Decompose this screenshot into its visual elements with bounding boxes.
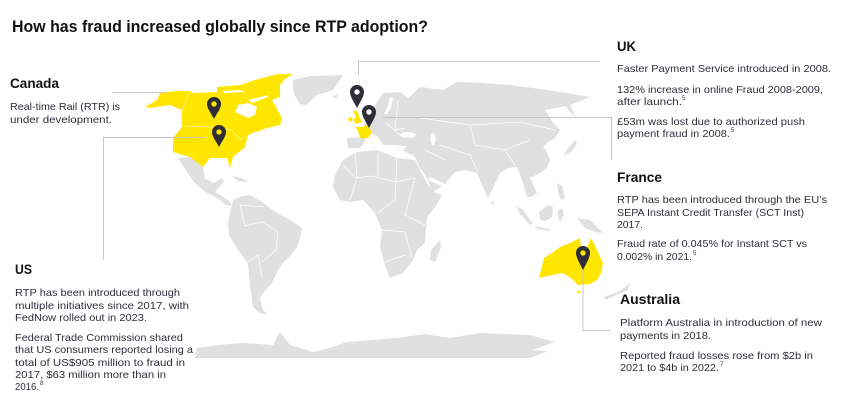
text block: Canada: Canada	[10, 76, 59, 91]
text block: Canada: under development.	[10, 114, 112, 126]
text block: France: SEPA Instant Credit Transfer (SCT Inst)	[617, 207, 804, 219]
text block: UK: 132% increase in online Fraud 2008-2009,	[617, 84, 823, 96]
connector lines	[104, 62, 612, 330]
text block: US: RTP has been introduced through	[15, 287, 180, 299]
text block: UK: payment fraud in 2008.	[617, 128, 730, 140]
country borders	[240, 100, 555, 278]
world map	[145, 74, 630, 358]
text block: UK	[617, 39, 831, 140]
land: grey countries	[178, 75, 630, 358]
text block: US	[15, 262, 193, 393]
text block: Australia: 2021 to $4b in 2022.	[620, 362, 719, 374]
text block: Canada: Real-time Rail (RTR) is	[10, 101, 120, 113]
text block: US: 2016.	[15, 381, 39, 393]
land: yellow North America	[145, 74, 293, 168]
text block: Australia: payments in 2018.	[620, 330, 711, 342]
text block: France: Fraud rate of 0.045% for Instant SCT vs	[617, 238, 807, 250]
text block: US: multiple initiatives since 2017, with	[15, 300, 189, 312]
text block: UK: Faster Payment Service introduced in 2008.	[617, 63, 831, 75]
text block: UK: 5	[682, 96, 686, 102]
text block: US: 2017, $63 million more than in	[15, 369, 166, 381]
text block: Australia: Platform Australia in introduction of new	[620, 317, 822, 329]
land: yellow UK and France	[348, 111, 372, 138]
text block: France: RTP has been introduced through the EU’s	[617, 194, 827, 206]
text block: US: 8	[40, 381, 44, 387]
text block: France	[617, 170, 827, 263]
text block: Australia	[620, 292, 822, 374]
text block: UK: after launch.	[617, 96, 682, 108]
text block: France: 2017.	[617, 219, 643, 231]
inland seas	[373, 97, 445, 186]
icon: pin France	[362, 105, 376, 128]
text block: Australia: Australia	[620, 292, 680, 307]
text block: US: FedNow rolled out in 2023.	[15, 312, 147, 324]
icon: pin US	[212, 125, 226, 147]
land: yellow Australia	[539, 238, 603, 294]
text block: UK: £53m was lost due to authorized push	[617, 116, 805, 128]
text block: UK: UK	[617, 39, 636, 54]
icon: pin Canada	[207, 97, 221, 119]
text block: Australia: 7	[720, 362, 724, 368]
title: How has fraud increased globally since RTP adoption?	[12, 17, 428, 36]
Hudson Bay	[235, 103, 257, 118]
text block: UK: 5	[731, 128, 735, 134]
text block: Canada	[10, 76, 120, 126]
icon: pin UK	[350, 85, 364, 108]
text block: US: US	[15, 262, 32, 277]
text block: US: Federal Trade Commission shared	[15, 332, 183, 344]
text block: Australia: Reported fraud losses rose from $2b in	[620, 350, 813, 362]
text block: France: 5	[693, 251, 697, 257]
national border lines on yellow	[182, 91, 256, 140]
text block: France: 0.002% in 2021.	[617, 251, 692, 263]
text block: France: France	[617, 170, 662, 185]
icon: pin Australia	[576, 246, 590, 270]
text block: US: that US consumers reported losing a	[15, 344, 193, 356]
text block: US: total of US$905 million to fraud in	[15, 357, 185, 369]
